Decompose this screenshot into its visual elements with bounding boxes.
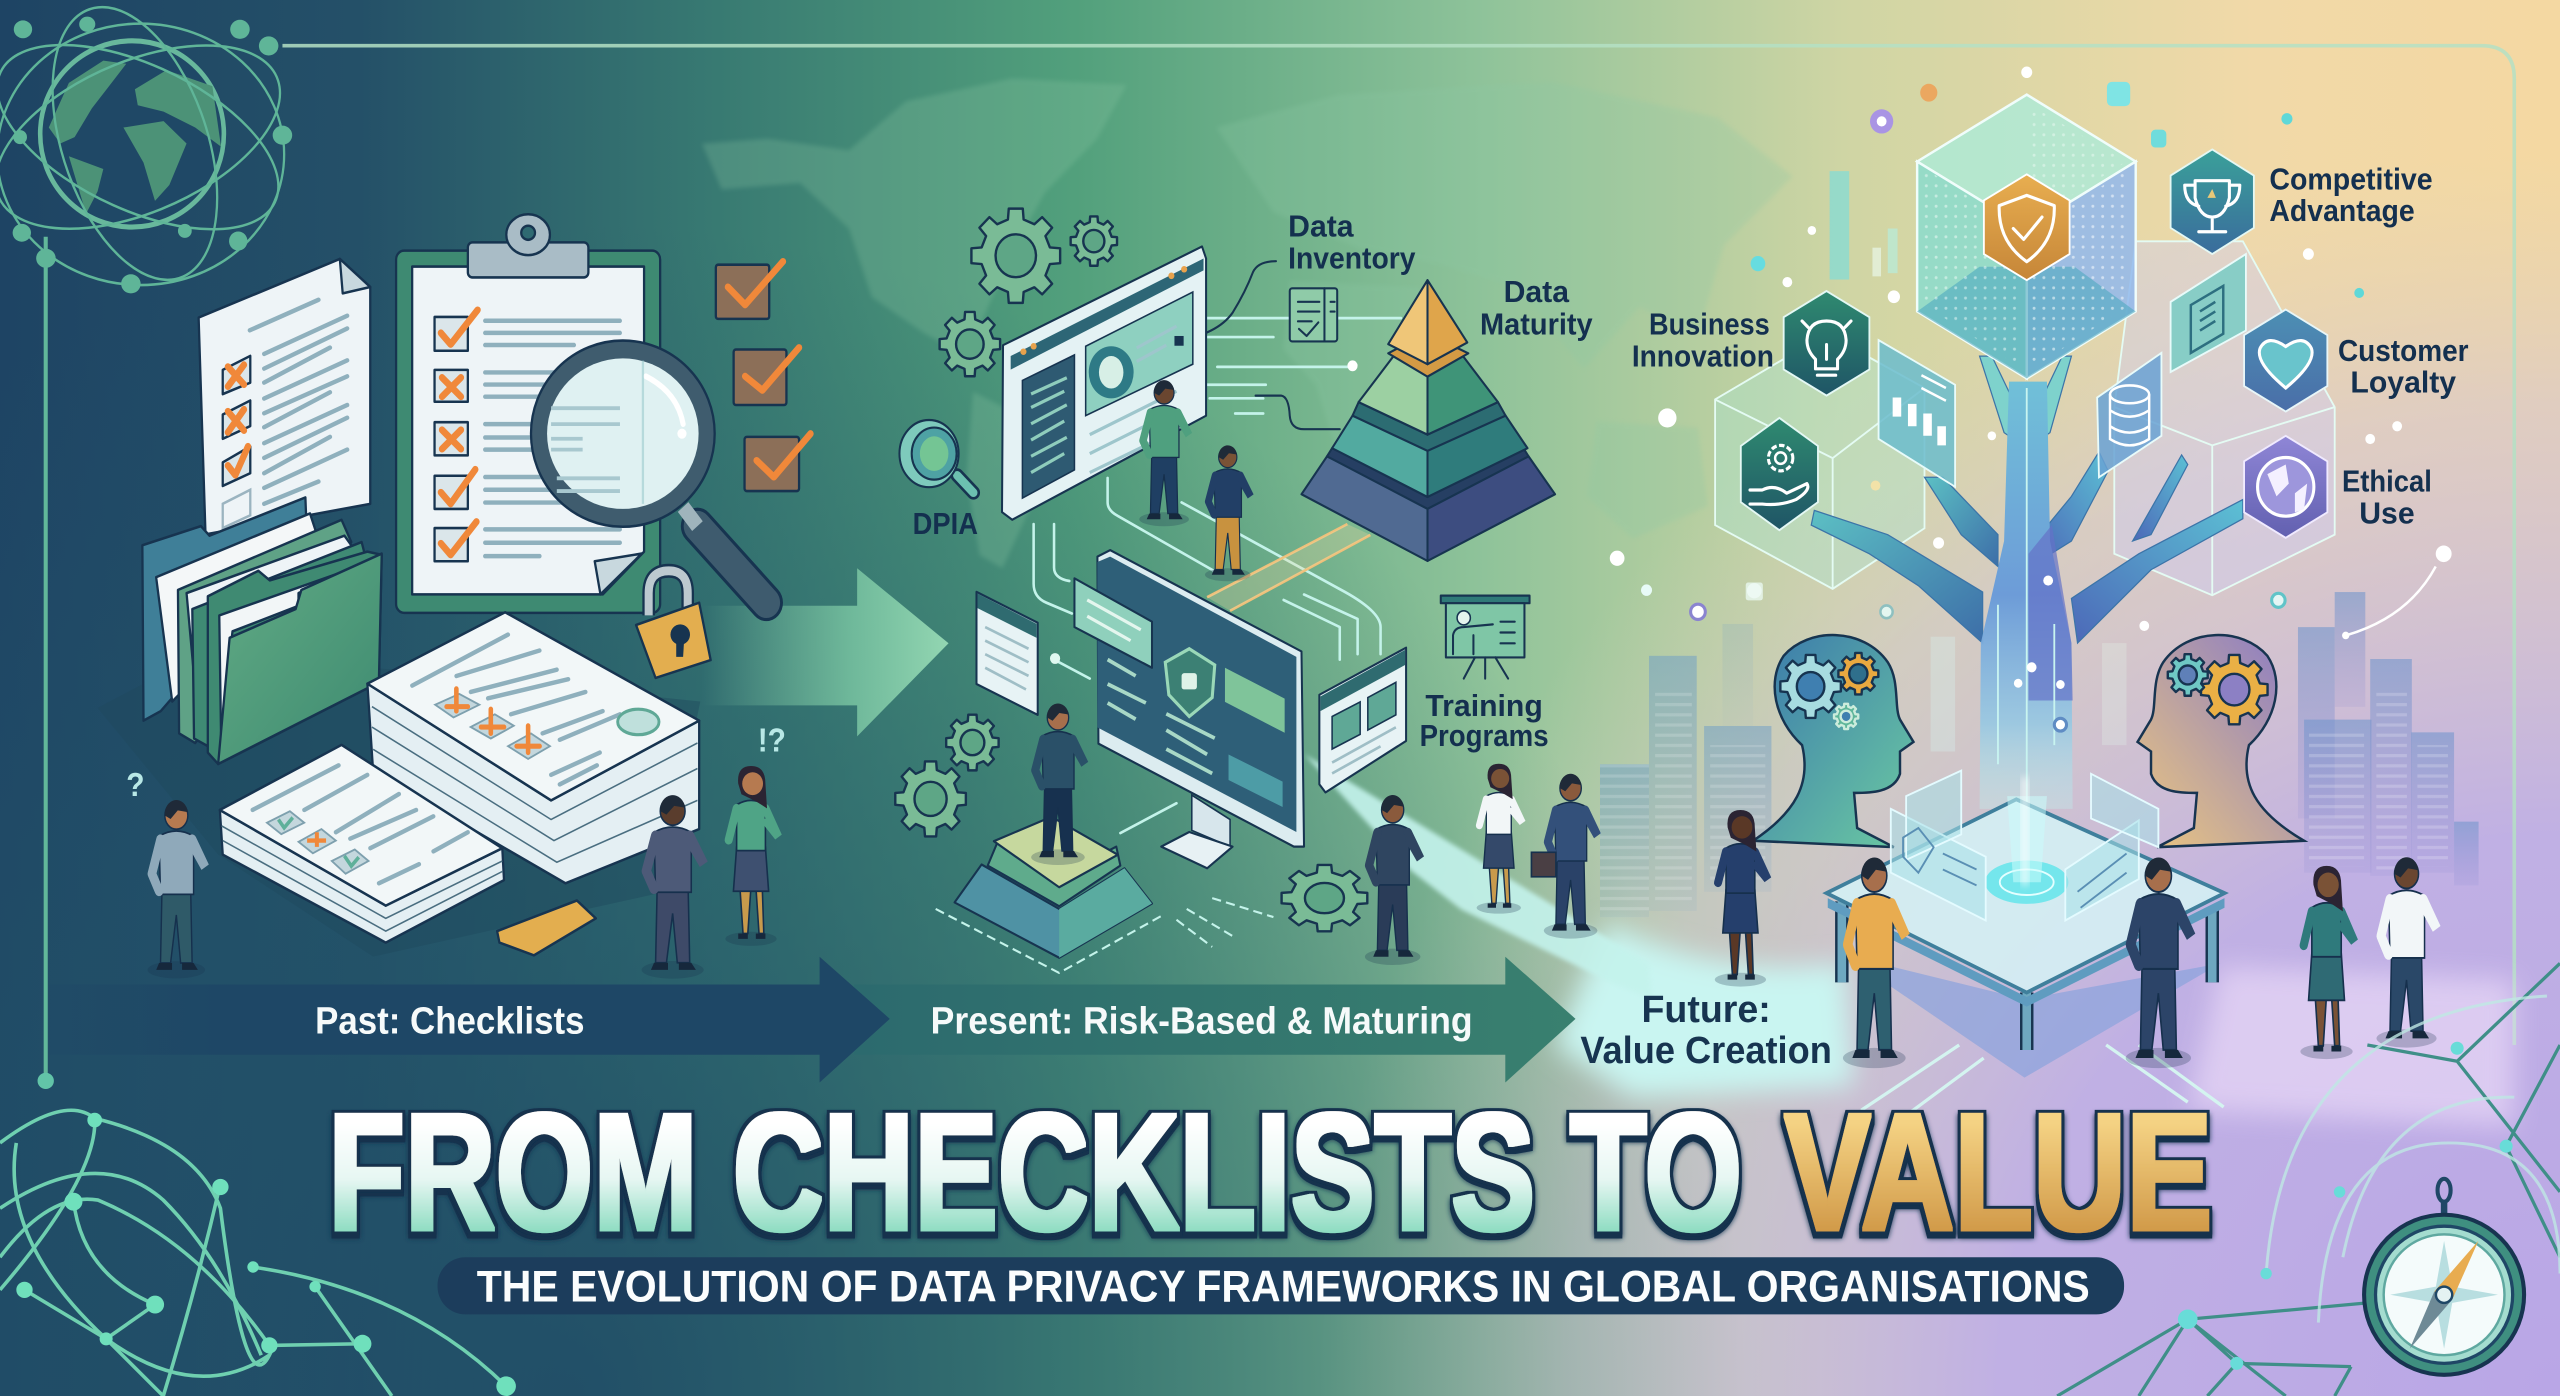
orbits [0,0,302,306]
label: competitive advantage: Advantage [2269,195,2415,228]
top browser screen [1002,247,1206,520]
person: walking man with briefcase [1531,774,1597,939]
label: customer loyalty: Customer [2338,335,2469,368]
stepped pedestal [936,817,1273,973]
person: puzzled manager [642,795,704,979]
clipboard [396,214,660,613]
label: data inventory [1288,211,1416,276]
label: data maturity: Data [1504,276,1569,309]
question marks: !? [758,721,786,759]
person: woman in yellow [1843,857,1906,1068]
arrow label: future: Value Creation [1580,1029,1832,1071]
person: puzzled analyst [148,800,205,978]
nodes [13,17,292,293]
label: business innovation: Business [1649,309,1770,342]
person: man at table [2126,857,2191,1068]
label: business innovation [1632,309,1774,374]
frame border line [282,46,2514,1045]
person: woman with tablet [1205,445,1251,581]
hexagon: heart [2244,310,2327,412]
icon: data inventory document [1290,288,1337,341]
main crystal cube [1917,95,2136,378]
label: customer loyalty: Loyalty [2350,367,2456,400]
hexagon: globe [2244,436,2327,538]
connection lines [1034,261,1401,833]
hexagon: shield badge [1984,174,2070,280]
label: business innovation: Innovation [1632,341,1774,374]
question marks [126,721,786,803]
label: data maturity: Maturity [1480,309,1593,342]
world map backdrop [702,78,1793,568]
floating check boxes [716,261,811,491]
label: data inventory: Inventory [1288,243,1416,276]
label: data maturity [1480,276,1593,342]
floating database card [2097,353,2161,477]
label: DPIA: DPIA [913,508,978,541]
person: woman shaking hands [2300,866,2354,1059]
icon: DPIA magnifier [899,420,973,493]
right head profile [2138,635,2304,847]
arrow label: future [1580,988,1832,1071]
person: puzzled woman [725,766,778,946]
floating clipboard card [2171,254,2246,372]
person: man on pedestal [1031,704,1085,865]
label: training programs [1420,690,1549,753]
left document stack [220,745,504,943]
magnifying glass [531,341,766,603]
skyline [1600,171,2479,917]
person: woman with tablet [1715,810,1768,987]
label: customer loyalty [2338,335,2469,400]
panel: present tools illustration [895,209,1555,973]
left floating document [976,592,1038,715]
left head profile [1753,635,1913,847]
subtitle pill: THE EVOLUTION OF DATA PRIVACY FRAMEWORKS IN GLOBAL ORGANISATIONS [477,1262,2090,1311]
holographic panels [1891,771,2158,920]
hexagon: lightbulb [1784,291,1869,396]
person: analyst at screen [1139,380,1189,526]
padlock [636,571,711,678]
right document stack [367,612,699,883]
arrow label: future: Future: [1641,988,1771,1030]
panel: future value tree illustration [1600,67,2479,1050]
globe network emblem [0,0,302,306]
past arrow band [49,957,1576,1083]
person: man with clipboard [1365,795,1420,965]
label: training programs: Training [1425,690,1543,723]
label: ethical use: Use [2359,497,2415,530]
left checklist paper [199,259,370,534]
sparkle dots [1610,67,2452,731]
network bottom left [0,1110,516,1396]
label: ethical use [2342,465,2432,530]
label: data inventory: Data [1288,211,1354,244]
label: ethical use: Ethical [2342,465,2432,498]
translucent side cubes [1715,241,2335,595]
folders [142,497,382,764]
label: training programs: Programs [1420,720,1549,753]
hexagon: helping hand [1741,418,1818,530]
arrow label: past: Past: Checklists [315,1000,584,1042]
person: man shaking hands [2376,857,2437,1048]
holographic table [1827,777,2224,1050]
road to the future [1304,754,1652,999]
label: competitive advantage [2269,163,2433,228]
gears [895,209,1367,931]
data maturity pyramid [1301,280,1555,561]
icon: compass [2364,1179,2524,1375]
title: FROM CHECKLISTS TO [328,1079,1742,1265]
network bottom right [2057,963,2560,1396]
bottom monitor [1074,550,1304,868]
icon: training board [1441,596,1530,679]
panel: past checklists illustration [98,214,811,957]
large pale transition arrow [702,568,949,736]
label: competitive advantage: Competitive [2269,163,2433,196]
floating chart card [1879,340,1955,487]
arrow label: present: Present: Risk-Based & Maturing [931,1000,1473,1042]
pale future ground [1554,923,2514,1127]
frame left rail with end node [38,237,54,1089]
question marks: ? [126,765,145,803]
title: VALUE [1784,1079,2212,1265]
tree branches [1811,356,2243,643]
tree trunk [1980,382,2073,809]
hexagon: trophy [2171,149,2254,254]
continents [49,61,221,214]
right floating document [1319,648,1406,792]
person: walking woman [1477,764,1522,914]
gold tick slab [497,901,596,955]
